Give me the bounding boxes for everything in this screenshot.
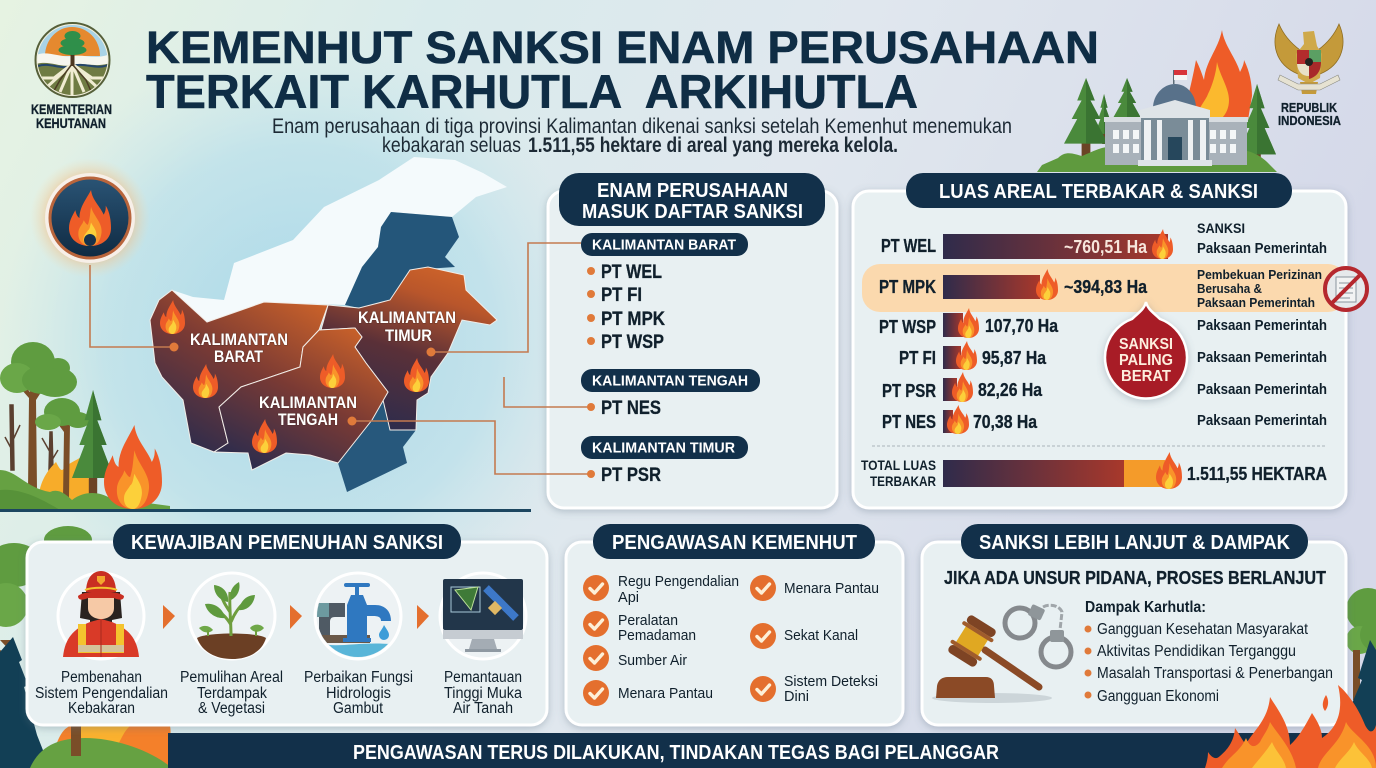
map: province labels [190, 308, 456, 429]
group: Kalimantan Barat: PT MPK [601, 309, 665, 330]
group: Kalimantan Timur: KALIMANTAN TIMUR [592, 440, 735, 456]
steps text: Terdampak [197, 685, 267, 702]
logo label [31, 102, 112, 131]
map: province labels: TENGAH [278, 410, 338, 429]
logo label: Republik Indonesia: INDONESIA [1278, 113, 1342, 128]
sanction column: Pembekuan Perizinan [1197, 267, 1322, 282]
heading: luas areal: LUAS AREAL TERBAKAR & SANKSI [939, 181, 1258, 203]
bar chart: burned area: 95,87 Ha [982, 348, 1047, 368]
sanction column: Paksaan Pemerintah [1197, 381, 1327, 398]
bar chart: burned area: PT NES [882, 412, 936, 432]
group: Kalimantan Barat: KALIMANTAN BARAT [592, 236, 736, 254]
total row: 1.511,55 HEKTARA [1187, 464, 1327, 484]
heading: pengawasan [593, 524, 875, 559]
heading: sanksi lanjut: SANKSI LEBIH LANJUT & DAMPAK [979, 532, 1291, 554]
forest: lower right [1340, 588, 1376, 768]
callout: sanksi paling berat: BERAT [1121, 368, 1171, 385]
callout: sanksi paling berat [1105, 302, 1187, 399]
map: province labels: KALIMANTAN [358, 308, 456, 327]
checklist: left: Menara Pantau [618, 685, 713, 702]
callout: sanksi paling berat: PALING [1119, 352, 1173, 369]
logo: Kementerian Kehutanan [36, 23, 110, 100]
sanction column: Paksaan Pemerintah [1197, 240, 1327, 257]
map: Kalimantan Tengah [214, 328, 388, 470]
arrow [163, 605, 175, 629]
map: north-east (blue) [345, 212, 459, 308]
title: KEMENHUT SANKSI ENAM PERUSAHAAN [146, 22, 1099, 73]
map of Kalimantan [150, 157, 507, 492]
bar chart: burned area [879, 229, 1173, 434]
steps text: Gambut [333, 700, 384, 717]
impact list [1084, 599, 1333, 705]
bar chart: burned area: 107,70 Ha [985, 316, 1059, 336]
title: TERKAIT KARHUTLA ARKIHUTLA [146, 65, 918, 118]
steps text: Hidrologis [326, 685, 391, 702]
map: south-east (blue) [338, 392, 416, 492]
subheading: JIKA ADA UNSUR PIDANA, PROSES BERLANJUT [944, 568, 1326, 588]
subtitle: Enam perusahaan di tiga provinsi Kalimantan dikenai sanksi setelah Kemenhut menemukan [272, 115, 1012, 138]
bar chart: burned area: ~394,83 Ha [1064, 277, 1148, 297]
steps text: Pemantauan [444, 669, 522, 686]
group: Kalimantan Timur [581, 436, 748, 486]
forest scene: lower left [0, 526, 172, 768]
group: Kalimantan Timur: PT PSR [601, 465, 661, 486]
checklist: right: Menara Pantau [784, 580, 879, 597]
bar chart: burned area: ~760,51 Ha [1064, 237, 1148, 257]
steps text: Sistem Pengendalian [35, 685, 168, 702]
sanction column: Paksaan Pemerintah [1197, 295, 1315, 310]
divider line [0, 509, 531, 512]
bar chart: burned area: PT WSP [879, 317, 936, 337]
bar chart: burned area: PT FI [899, 348, 936, 368]
heading: luas areal [906, 173, 1292, 208]
checklist: left [583, 573, 739, 706]
checklist: right: Sekat Kanal [784, 627, 858, 644]
heading: sanksi lanjut [961, 524, 1308, 559]
heading: pengawasan: PENGAWASAN KEMENHUT [612, 532, 857, 554]
icon: fire badge [30, 158, 150, 278]
connector lines [90, 243, 590, 474]
sanction column: Paksaan Pemerintah [1197, 412, 1327, 429]
arrow [290, 605, 302, 629]
impact list: Dampak Karhutla: [1085, 599, 1206, 616]
title [146, 22, 1099, 118]
checklist: right: Dini [784, 688, 809, 705]
group: Kalimantan Tengah [581, 369, 760, 419]
group: Kalimantan Barat: PT FI [601, 285, 642, 306]
heading: kewajiban: KEWAJIBAN PEMENUHAN SANKSI [131, 532, 443, 554]
map: north (white) [172, 157, 507, 322]
logo: Garuda [1275, 24, 1343, 94]
panel: luas areal terbakar [853, 173, 1367, 508]
panel: enam perusahaan [548, 173, 837, 508]
total row: TERBAKAR [870, 473, 936, 489]
bar chart: burned area: 70,38 Ha [973, 412, 1038, 432]
illustration: burning government building [1037, 30, 1277, 172]
footer banner: PENGAWASAN TERUS DILAKUKAN, TINDAKAN TEGAS BAGI PELANGGAR [353, 742, 999, 764]
impact list: Masalah Transportasi & Penerbangan [1097, 665, 1333, 682]
heading: enam perusahaan: MASUK DAFTAR SANKSI [582, 201, 803, 223]
subtitle: 1.511,55 hektare di areal yang mereka kelola. [528, 134, 898, 157]
icon: seedling [189, 573, 275, 659]
bar chart: burned area: PT WEL [881, 236, 936, 256]
steps text: Kebakaran [68, 700, 135, 717]
map: province labels: KALIMANTAN [190, 330, 288, 349]
icon: firefighter [58, 571, 144, 659]
heading: kewajiban [113, 524, 461, 559]
group: Kalimantan Barat: PT WEL [601, 262, 662, 283]
steps text: Perbaikan Fungsi [304, 669, 413, 686]
bar chart: burned area: PT PSR [882, 381, 936, 401]
icon: water tap [315, 573, 401, 662]
footer banner [168, 733, 1376, 768]
total row: TOTAL LUAS [861, 457, 936, 473]
checklist: left: Regu Pengendalian [618, 573, 739, 590]
icon: prohibited document [1325, 268, 1367, 310]
sanction column: Paksaan Pemerintah [1197, 349, 1327, 366]
checklist: left: Sumber Air [618, 652, 687, 669]
sanction column: SANKSI [1197, 220, 1245, 236]
callout: sanksi paling berat: SANKSI [1119, 336, 1173, 353]
checklist: left: Pemadaman [618, 627, 696, 644]
steps text: Pembenahan [61, 669, 142, 686]
checklist: left: Api [618, 589, 639, 606]
icon: monitor with satellite [440, 573, 526, 659]
group: Kalimantan Tengah: KALIMANTAN TENGAH [592, 372, 748, 390]
map: province labels: TIMUR [385, 326, 432, 345]
heading: enam perusahaan [559, 173, 825, 226]
logo label: Republik Indonesia [1278, 100, 1342, 128]
steps text: Pemulihan Areal [180, 669, 283, 686]
map: Kalimantan Timur [321, 267, 497, 430]
group: Kalimantan Tengah: PT NES [601, 398, 661, 419]
bar chart: burned area: 82,26 Ha [978, 380, 1043, 400]
total row [861, 446, 1327, 489]
icon: gavel and handcuffs [932, 604, 1071, 703]
steps text [35, 669, 522, 717]
map: Kalimantan Barat [150, 290, 328, 452]
checklist: left: Peralatan [618, 612, 678, 629]
highlight row: PT MPK [862, 264, 1346, 312]
bar chart: burned area: PT MPK [879, 277, 936, 297]
subtitle: kebakaran seluas [382, 134, 521, 157]
sanction column [1197, 220, 1327, 429]
impact list: Aktivitas Pendidikan Terganggu [1097, 643, 1296, 660]
map: province labels: KALIMANTAN [259, 393, 357, 412]
subtitle [272, 115, 1012, 157]
checklist: right: Sistem Deteksi [784, 673, 878, 690]
arrow [417, 605, 429, 629]
sanction column: Paksaan Pemerintah [1197, 317, 1327, 334]
logo label: Republik Indonesia: REPUBLIK [1281, 100, 1338, 115]
steps text: Tinggi Muka [444, 685, 522, 702]
steps text: Air Tanah [453, 700, 513, 717]
logo label: KEMENTERIAN [31, 102, 112, 117]
impact list: Gangguan Ekonomi [1097, 688, 1219, 705]
map: province labels: BARAT [214, 347, 264, 366]
connector dots [170, 342, 595, 478]
logo label: KEHUTANAN [36, 116, 106, 131]
group: Kalimantan Barat: PT WSP [601, 332, 664, 353]
map: flames [160, 300, 429, 453]
steps text: & Vegetasi [198, 700, 265, 717]
impact list: Gangguan Kesehatan Masyarakat [1097, 621, 1309, 638]
panel: kewajiban [27, 524, 547, 725]
forest scene: left [0, 342, 170, 510]
heading: enam perusahaan: ENAM PERUSAHAAN [597, 180, 788, 202]
panel: pengawasan [566, 524, 903, 725]
panel: sanksi lanjut [922, 524, 1346, 725]
group: Kalimantan Barat [581, 233, 748, 353]
checklist: right [750, 575, 879, 705]
sanction column: Berusaha & [1197, 281, 1262, 296]
flames over lower right corner [1205, 685, 1376, 768]
